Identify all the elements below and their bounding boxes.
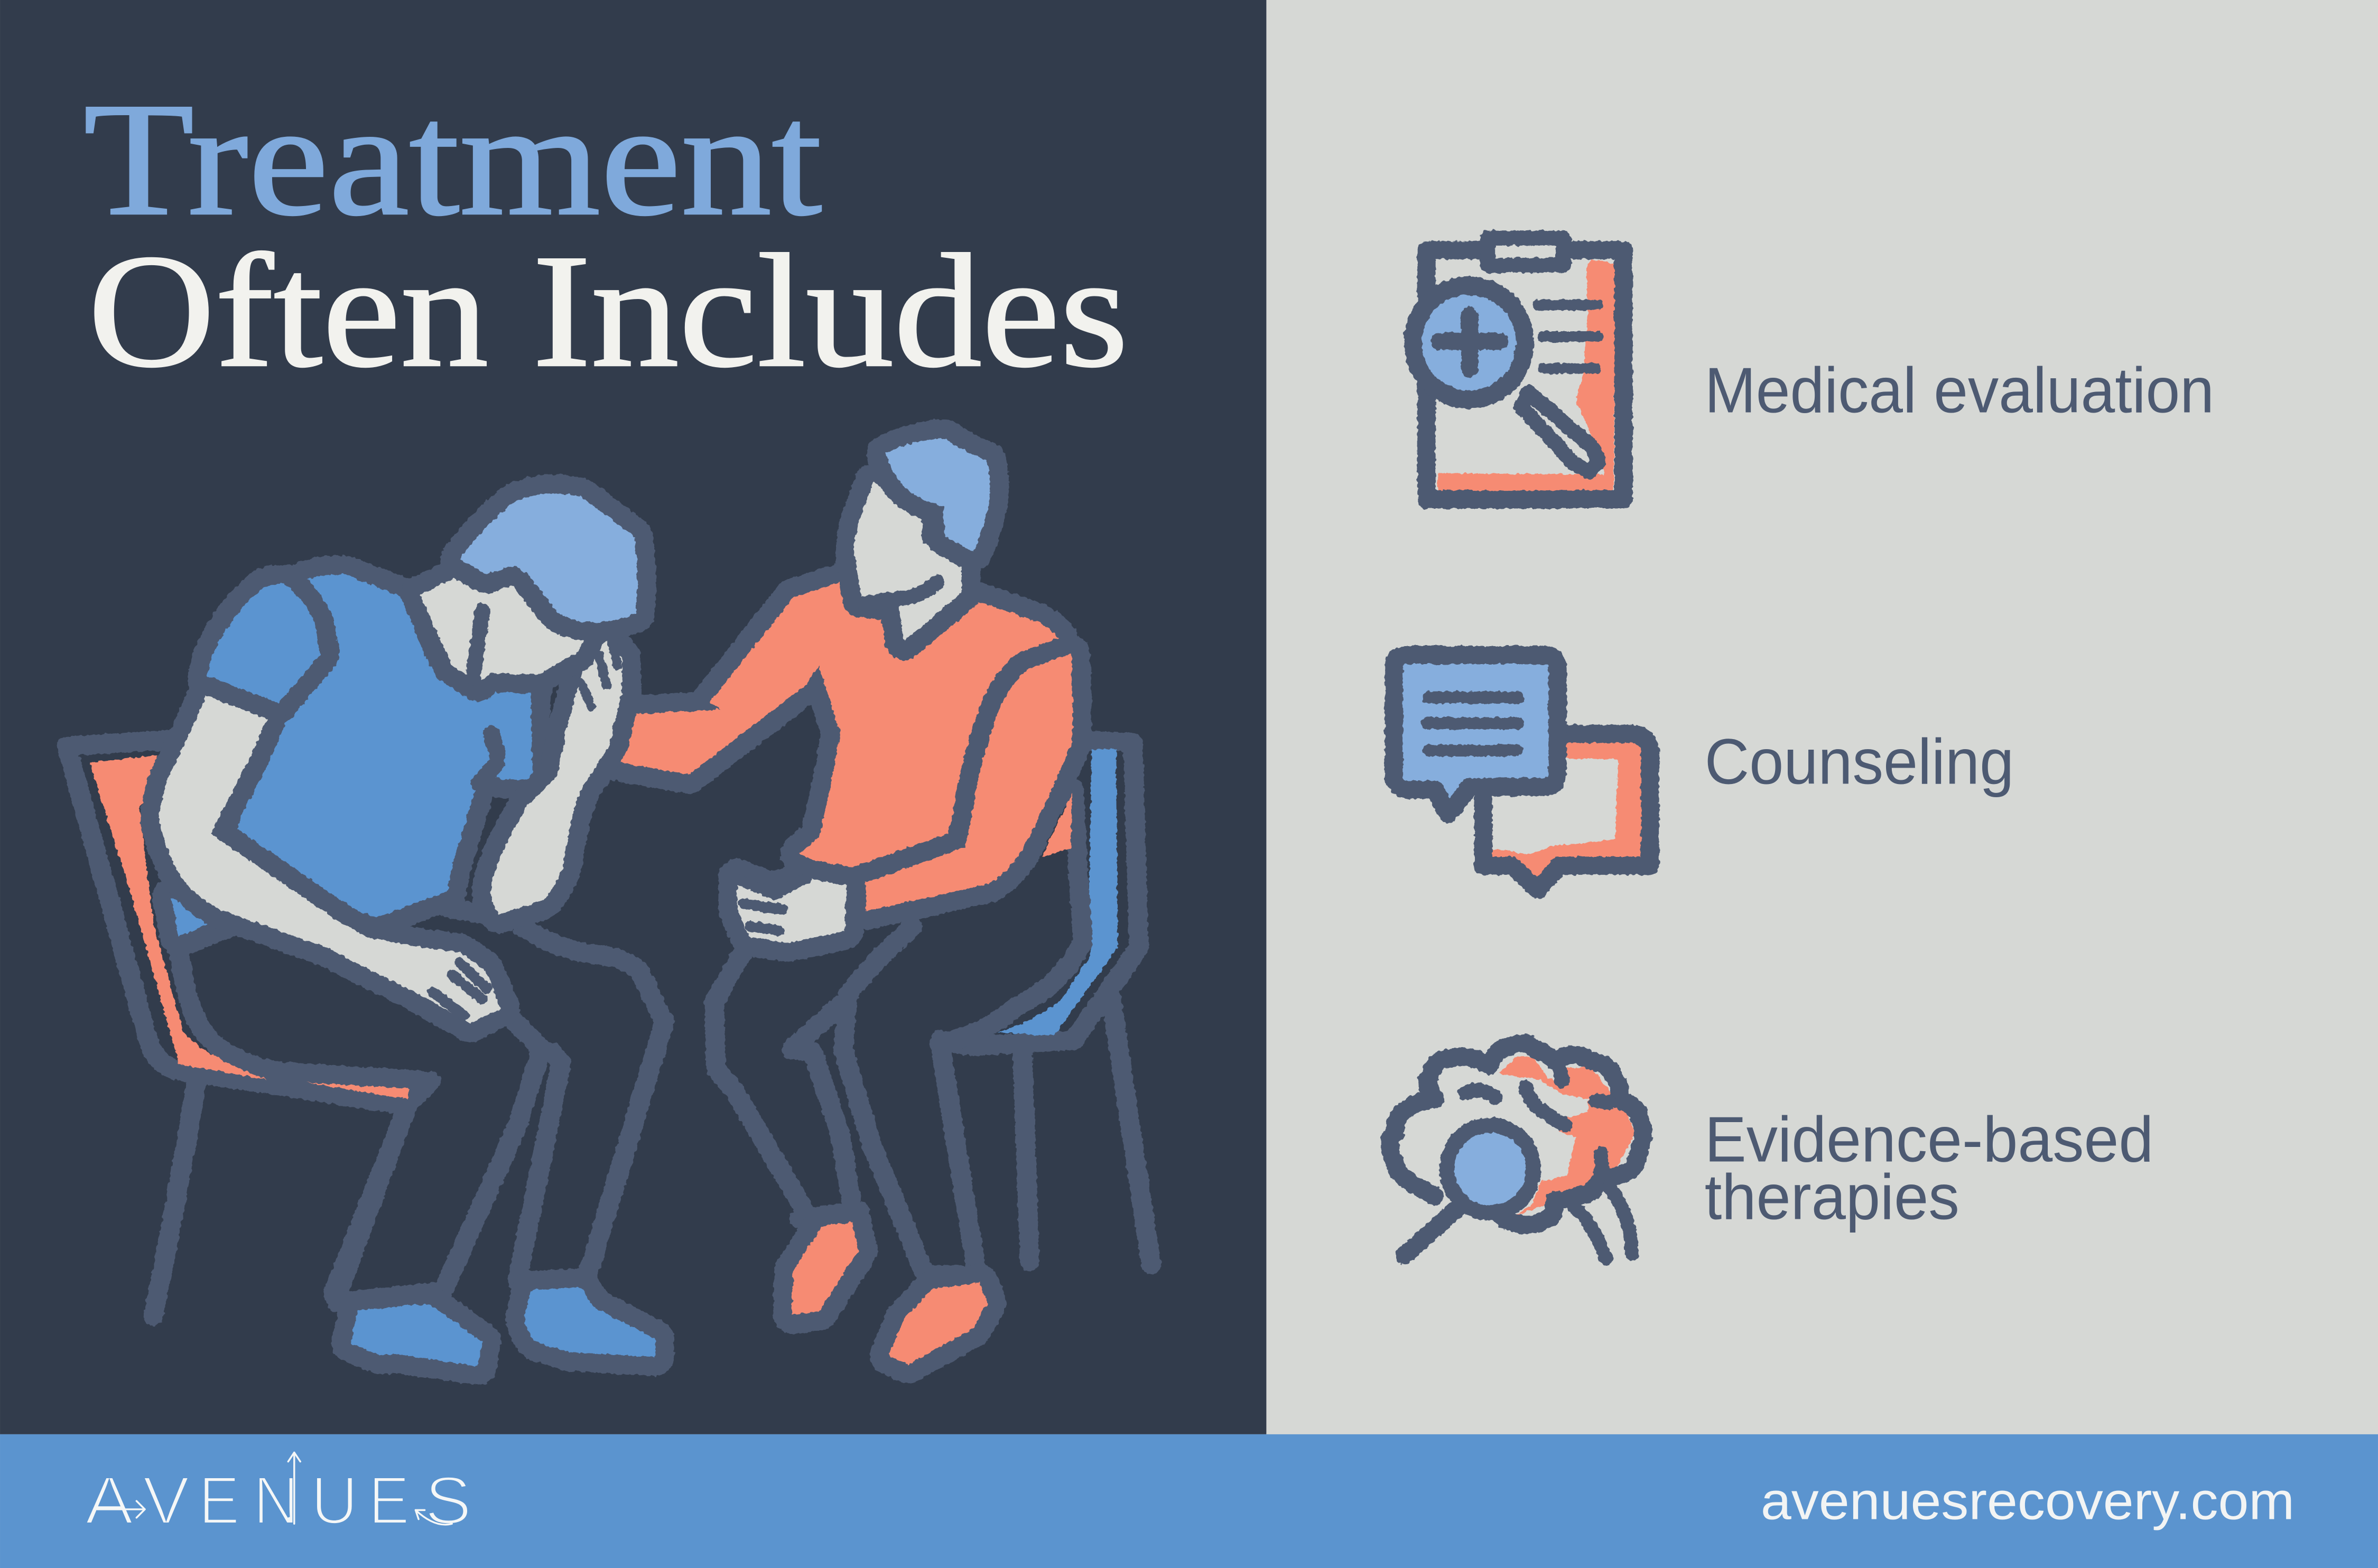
- blue speech bubble: [1394, 655, 1557, 814]
- blue shirt hem behind arm: [171, 898, 221, 937]
- logo wordmark: S: [425, 1463, 472, 1538]
- coral bubble inner cut-out: [1492, 758, 1618, 855]
- left man fingers: [432, 963, 487, 1016]
- right man hair: [886, 438, 990, 552]
- logo wordmark: E: [368, 1463, 410, 1538]
- icon: two speech bubbles: [1394, 655, 1650, 890]
- illustration: two men seated in conversation: [67, 438, 1151, 1366]
- clipboard outline: [1426, 250, 1623, 499]
- title line: Often Includes: Often Includes: [88, 221, 1128, 401]
- magnifier lens: [1413, 286, 1525, 399]
- brain stem lines: [1574, 1187, 1632, 1258]
- left man lower arm: [159, 696, 500, 1023]
- right man finger lines: [737, 878, 807, 931]
- left chair coral back: [89, 755, 267, 1079]
- title: [83, 70, 1128, 401]
- title line: Treatment: Treatment: [83, 70, 823, 249]
- left man legs: [333, 926, 664, 1302]
- logo arrows: [97, 1452, 452, 1525]
- right chair frame: [940, 740, 1151, 1264]
- icon: brain with magnifier: [1389, 1043, 1643, 1258]
- left dark panel: [0, 0, 1266, 1434]
- brain inner folds: [1465, 1066, 1609, 1178]
- right man sleeve: [866, 654, 1073, 911]
- text: Counseling: Counseling: [1705, 726, 2014, 798]
- text line: therapies: therapies: [1705, 1161, 1959, 1233]
- logo: Avenues: [85, 1452, 472, 1538]
- left man hair: [460, 493, 637, 622]
- logo wordmark: A: [85, 1463, 134, 1538]
- left man ear line: [473, 611, 482, 678]
- coral speech bubble: [1483, 734, 1650, 890]
- left man shirt body: [237, 574, 532, 917]
- left man shirt sleeve: [206, 583, 320, 706]
- right man arm reaching out: [612, 582, 1058, 875]
- right man hand: [737, 878, 846, 943]
- left man cheek fingers: [581, 637, 617, 706]
- clipboard text lines: [1538, 305, 1599, 368]
- clipboard clip: [1488, 238, 1564, 265]
- footer bar: [0, 1434, 2378, 1568]
- medical plus sign: [1439, 315, 1500, 368]
- right man chair coral gap: [1042, 793, 1072, 856]
- magnifier lens: [1447, 1125, 1534, 1213]
- icon: clipboard with medical magnifier: [1413, 238, 1623, 499]
- left man lap lines: [179, 682, 543, 948]
- logo wordmark: N: [253, 1463, 299, 1538]
- logo wordmark: V: [143, 1463, 190, 1538]
- right man chin line: [865, 582, 937, 603]
- left man left shoe: [350, 1304, 482, 1366]
- right man legs: [714, 898, 1083, 1275]
- right background panel: [1266, 0, 2378, 1434]
- magnifier handle: [1405, 1207, 1459, 1255]
- clipboard coral shading: [1438, 259, 1615, 493]
- logo wordmark: U: [311, 1463, 358, 1538]
- text: Medical evaluation: Medical evaluation: [1705, 354, 2214, 426]
- right man back shoe: [889, 1283, 987, 1365]
- text: Evidence-based therapies: [1705, 1103, 2153, 1233]
- left man face: [420, 577, 587, 682]
- brain outline: [1389, 1043, 1643, 1225]
- brain coral shading: [1498, 1057, 1635, 1217]
- website url: avenuesrecovery.com: [1761, 1472, 2295, 1531]
- left man hand on cheek: [491, 637, 622, 914]
- text line: Evidence-based: Evidence-based: [1705, 1103, 2153, 1175]
- logo wordmark: E: [199, 1463, 239, 1538]
- right chair: [940, 740, 1151, 1264]
- right man front shoe: [792, 1222, 858, 1314]
- left chair: [67, 740, 431, 1316]
- right man face and neck: [854, 482, 962, 641]
- magnifier handle: [1521, 393, 1599, 472]
- blue bubble text lines: [1427, 697, 1518, 751]
- right chair blue back: [998, 749, 1118, 1035]
- left man right shoe: [525, 1287, 655, 1357]
- left chair frame: [67, 740, 431, 1316]
- left man shirt detail: [479, 734, 497, 784]
- left chair coral seat: [306, 1082, 410, 1099]
